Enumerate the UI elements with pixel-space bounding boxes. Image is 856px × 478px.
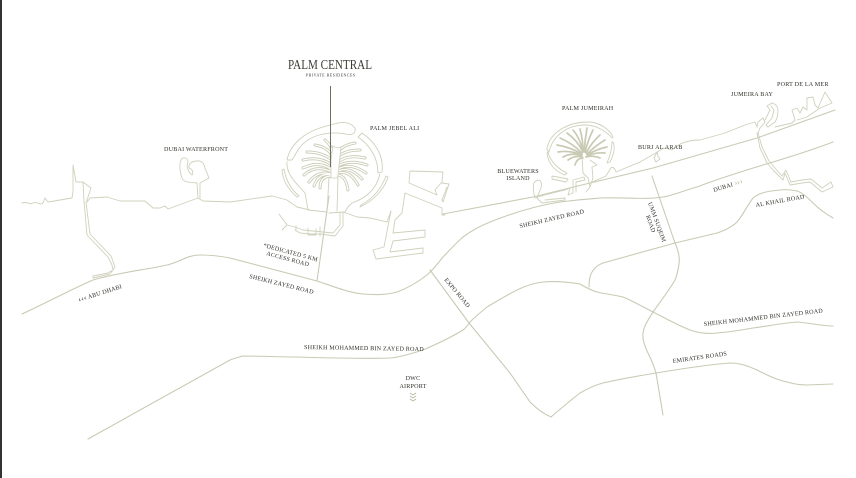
label: dedicated access road: *DEDICATED 5 KM: [262, 243, 319, 264]
Bluewaters island: [533, 180, 570, 203]
label: Umm Suqeim Road: UMM SUQEIM: [646, 202, 666, 244]
label: Bluewaters Island: ISLAND: [506, 176, 530, 182]
label: Port De La Mer: PORT DE LA MER: [777, 82, 829, 88]
road: Expo Road: [430, 270, 551, 417]
fronds: [557, 128, 607, 165]
label: Expo Road: EXPO ROAD: [442, 277, 471, 310]
Jebel Ali port channel: [83, 182, 115, 278]
label: Emirates Road: EMIRATES ROADS: [672, 351, 728, 365]
label: Palm Jebel Ali: PALM JEBEL ALI: [370, 126, 419, 132]
road: Umm Suqeim Road: [643, 176, 679, 415]
Jumeira Bay island: [757, 103, 778, 133]
label: Jumeira Bay: JUMEIRA BAY: [731, 92, 773, 98]
label: Sheikh Mohammed Bin Zayed Road east: SHEIKH MOHAMMED BIN ZAYED ROAD: [704, 308, 824, 328]
left page edge: [0, 0, 2, 478]
western coastline: [22, 165, 310, 210]
label: Bluewaters Island: BLUEWATERS: [497, 169, 539, 175]
crescent: [547, 122, 613, 152]
road: Jumeirah coast road: [443, 110, 835, 214]
label: Bluewaters Island: [497, 169, 539, 182]
label: Abu Dhabi direction: ‹‹‹ ABU DHABI: [77, 281, 123, 304]
label: Palm Jumeirah: PALM JUMEIRAH: [562, 106, 614, 112]
Dubai coast to Jumeira Bay: [590, 122, 757, 183]
marina causeway: [279, 212, 343, 236]
label: DWC Airport: AIRPORT: [399, 384, 427, 390]
crescent and breakwater: [287, 122, 355, 160]
title: Palm Central: PRIVATE RESIDENCES: [306, 74, 356, 78]
label: Dubai Waterfront: DUBAI WATERFRONT: [164, 147, 228, 153]
label: DWC Airport: DWC: [406, 376, 420, 382]
label: Al Khail Road: AL KHAIL ROAD: [755, 194, 806, 209]
Palm Jumeirah: [547, 122, 614, 195]
label: Umm Suqeim Road: ROAD: [644, 215, 656, 234]
road: Sheikh Mohammed Bin Zayed Road: [88, 282, 833, 439]
Dubai Waterfront island: [180, 158, 209, 198]
pointer line to Palm Central: [330, 86, 332, 167]
Burj Al Arab: [654, 152, 660, 162]
road: Sheikh Zayed Road: [22, 142, 833, 314]
road: Emirates Road: [551, 363, 833, 417]
label: dedicated access road: ACCESS ROAD: [266, 251, 310, 268]
label: Burj Al Arab: BURJ AL ARAB: [638, 145, 683, 151]
title: Palm Central: PALM CENTRAL: [288, 57, 372, 72]
label: Sheikh Mohammed Bin Zayed Road west: SHEIKH MOHAMMED BIN ZAYED ROAD: [304, 345, 424, 353]
Dubai Creek: [757, 133, 833, 192]
road: dedicated access road: [317, 196, 329, 281]
Jebel Ali port basins: [373, 171, 449, 259]
label: Sheikh Zayed Road west: SHEIKH ZAYED ROAD: [249, 274, 315, 296]
label: Sheikh Zayed Road east: SHEIKH ZAYED ROAD: [519, 209, 585, 230]
Palm Jebel Ali: [279, 122, 391, 236]
Port De La Mer: [775, 92, 832, 127]
icon: airport chevrons: [410, 393, 416, 401]
road: Al Khail Road: [589, 190, 833, 287]
label: DWC Airport: [399, 376, 427, 390]
palm fronds: [303, 140, 367, 212]
title: Palm Central: [288, 57, 372, 78]
label: Dubai direction: DUBAI ›››: [712, 176, 744, 194]
